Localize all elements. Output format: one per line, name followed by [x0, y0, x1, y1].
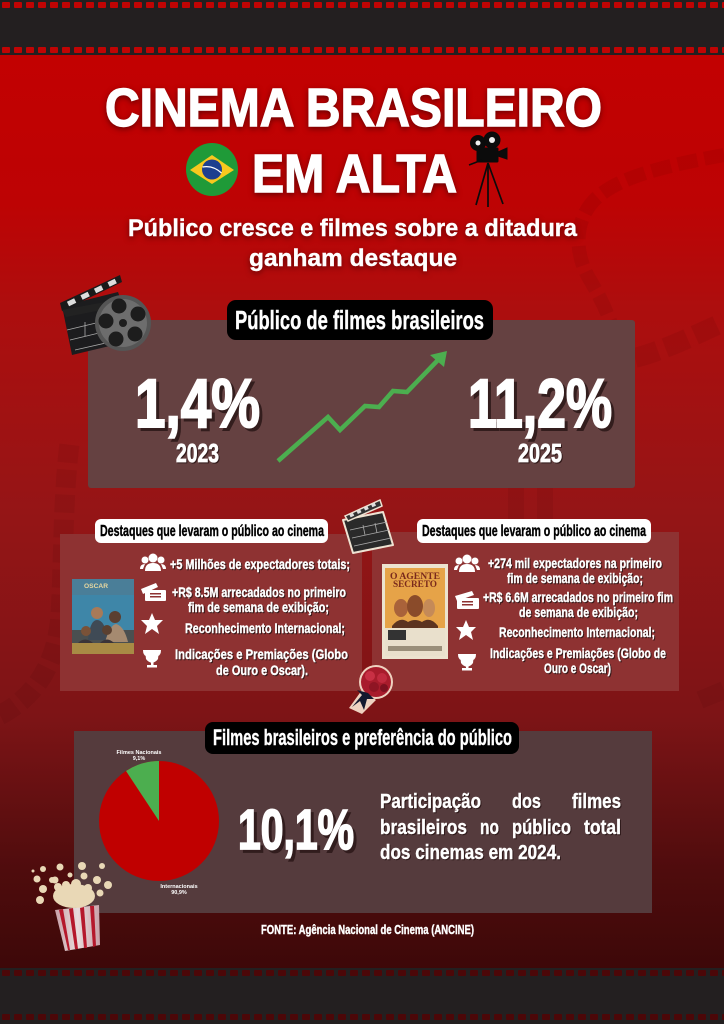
text: participação [380, 791, 621, 864]
text: destaques Ainda Estou Aqui [170, 556, 350, 678]
top film band [0, 0, 724, 55]
icon: movie camera on tripod [469, 132, 507, 207]
icon: trophy [458, 654, 476, 670]
subtitle: ganham destaque [249, 245, 457, 272]
heading: público de filmes brasileiros [227, 300, 493, 340]
text: destaques O Agente Secreto: fim de semana de exibição; [507, 570, 643, 586]
text: participação: público [512, 817, 571, 839]
big number 2023: 2023 [176, 438, 219, 468]
big number 2025: 11,2% [468, 365, 612, 442]
poster: O Agente Secreto [382, 564, 448, 659]
text: destaques O Agente Secreto: de semana de exibição; [519, 604, 638, 620]
poster: O Agente Secreto: O AGENTE [390, 571, 440, 581]
heading: destaques right [417, 519, 651, 543]
icon: star [456, 620, 476, 640]
heading: destaques left [95, 519, 328, 543]
heading: destaques left: Destaques que levaram o público ao cinema [100, 523, 324, 540]
text: destaques O Agente Secreto: Ouro e Oscar) [544, 660, 611, 676]
text: participação: filmes [572, 791, 621, 813]
icon: tickets [455, 591, 479, 609]
text: destaques O Agente Secreto: Reconhecimento Internacional; [499, 624, 655, 640]
big number 2025: 2025 [518, 438, 562, 468]
icon: audience [140, 554, 166, 571]
icon: rose bouquet sticker [349, 665, 393, 714]
icon: trophy [143, 650, 161, 668]
big number 10,1%: 10,1% [238, 798, 354, 862]
panel: público de filmes brasileiros [88, 320, 635, 488]
panel: O Agente Secreto [372, 532, 679, 691]
pie chart: 9,1% [133, 756, 145, 762]
text: destaques Ainda Estou Aqui: Indicações e Premiações (Globo [175, 646, 348, 662]
icon: audience [454, 554, 480, 572]
text: destaques Ainda Estou Aqui: fim de semana de exibição; [188, 599, 329, 615]
pie chart: Internacionais [160, 884, 198, 890]
big number 2025 [468, 365, 612, 468]
pie chart: Filmes Nacionais [117, 750, 161, 756]
poster: O Agente Secreto: SECRETO [393, 579, 437, 589]
icon: clapperboard and film reel [60, 275, 151, 355]
text: participação: total [584, 817, 621, 839]
text: destaques Ainda Estou Aqui: de Ouro e Oscar). [216, 662, 308, 678]
heading: público de filmes brasileiros: Público de filmes brasileiros [235, 305, 484, 335]
text: destaques O Agente Secreto: +274 mil expectadores na primeiro [488, 555, 662, 571]
text: destaques O Agente Secreto [483, 555, 673, 676]
title: EM ALTA [252, 144, 457, 204]
text: participação: dos [512, 791, 541, 813]
big number 2023 [135, 365, 260, 468]
subtitle [128, 215, 578, 272]
icon: star [141, 613, 163, 634]
bottom film band [0, 968, 724, 1024]
panel: preferência do público [74, 731, 652, 913]
poster: Ainda Estou Aqui: OSCAR [84, 584, 109, 590]
pie chart [99, 750, 219, 896]
text: participação: brasileiros [380, 817, 467, 839]
title [105, 78, 602, 204]
text: destaques Ainda Estou Aqui: +R$ 8.5M arrecadados no primeiro [172, 584, 346, 600]
poster: Ainda Estou Aqui [72, 579, 134, 654]
text: participação: Participação [380, 791, 481, 813]
source: FONTE: Agência Nacional de Cinema (ANCINE) [261, 922, 474, 937]
text: destaques O Agente Secreto: Indicações e Premiações (Globo de [490, 645, 666, 661]
text: destaques Ainda Estou Aqui: Reconhecimento Internacional; [185, 620, 345, 636]
icon: clapperboard sticker [343, 500, 393, 553]
icon: popcorn bucket [32, 862, 112, 951]
arrow: growth line [278, 351, 447, 461]
film strip watermark [0, 155, 724, 715]
panel: Ainda Estou Aqui [60, 534, 362, 691]
subtitle: Público cresce e filmes sobre a ditadura [128, 215, 578, 242]
icon: tickets [141, 583, 166, 601]
text: participação: no [480, 817, 499, 839]
text: participação: dos cinemas em 2024. [380, 842, 561, 864]
icon: Brazil flag [186, 143, 238, 196]
title: CINEMA BRASILEIRO [105, 78, 602, 138]
big number 2023: 1,4% [135, 365, 260, 442]
pie chart: 90,9% [171, 890, 187, 896]
text: destaques Ainda Estou Aqui: +5 Milhões de expectadores totais; [170, 556, 350, 572]
heading: filmes brasileiros e preferência: Filmes brasileiros e preferência do público [213, 725, 512, 750]
heading: filmes brasileiros e preferência [205, 722, 519, 754]
